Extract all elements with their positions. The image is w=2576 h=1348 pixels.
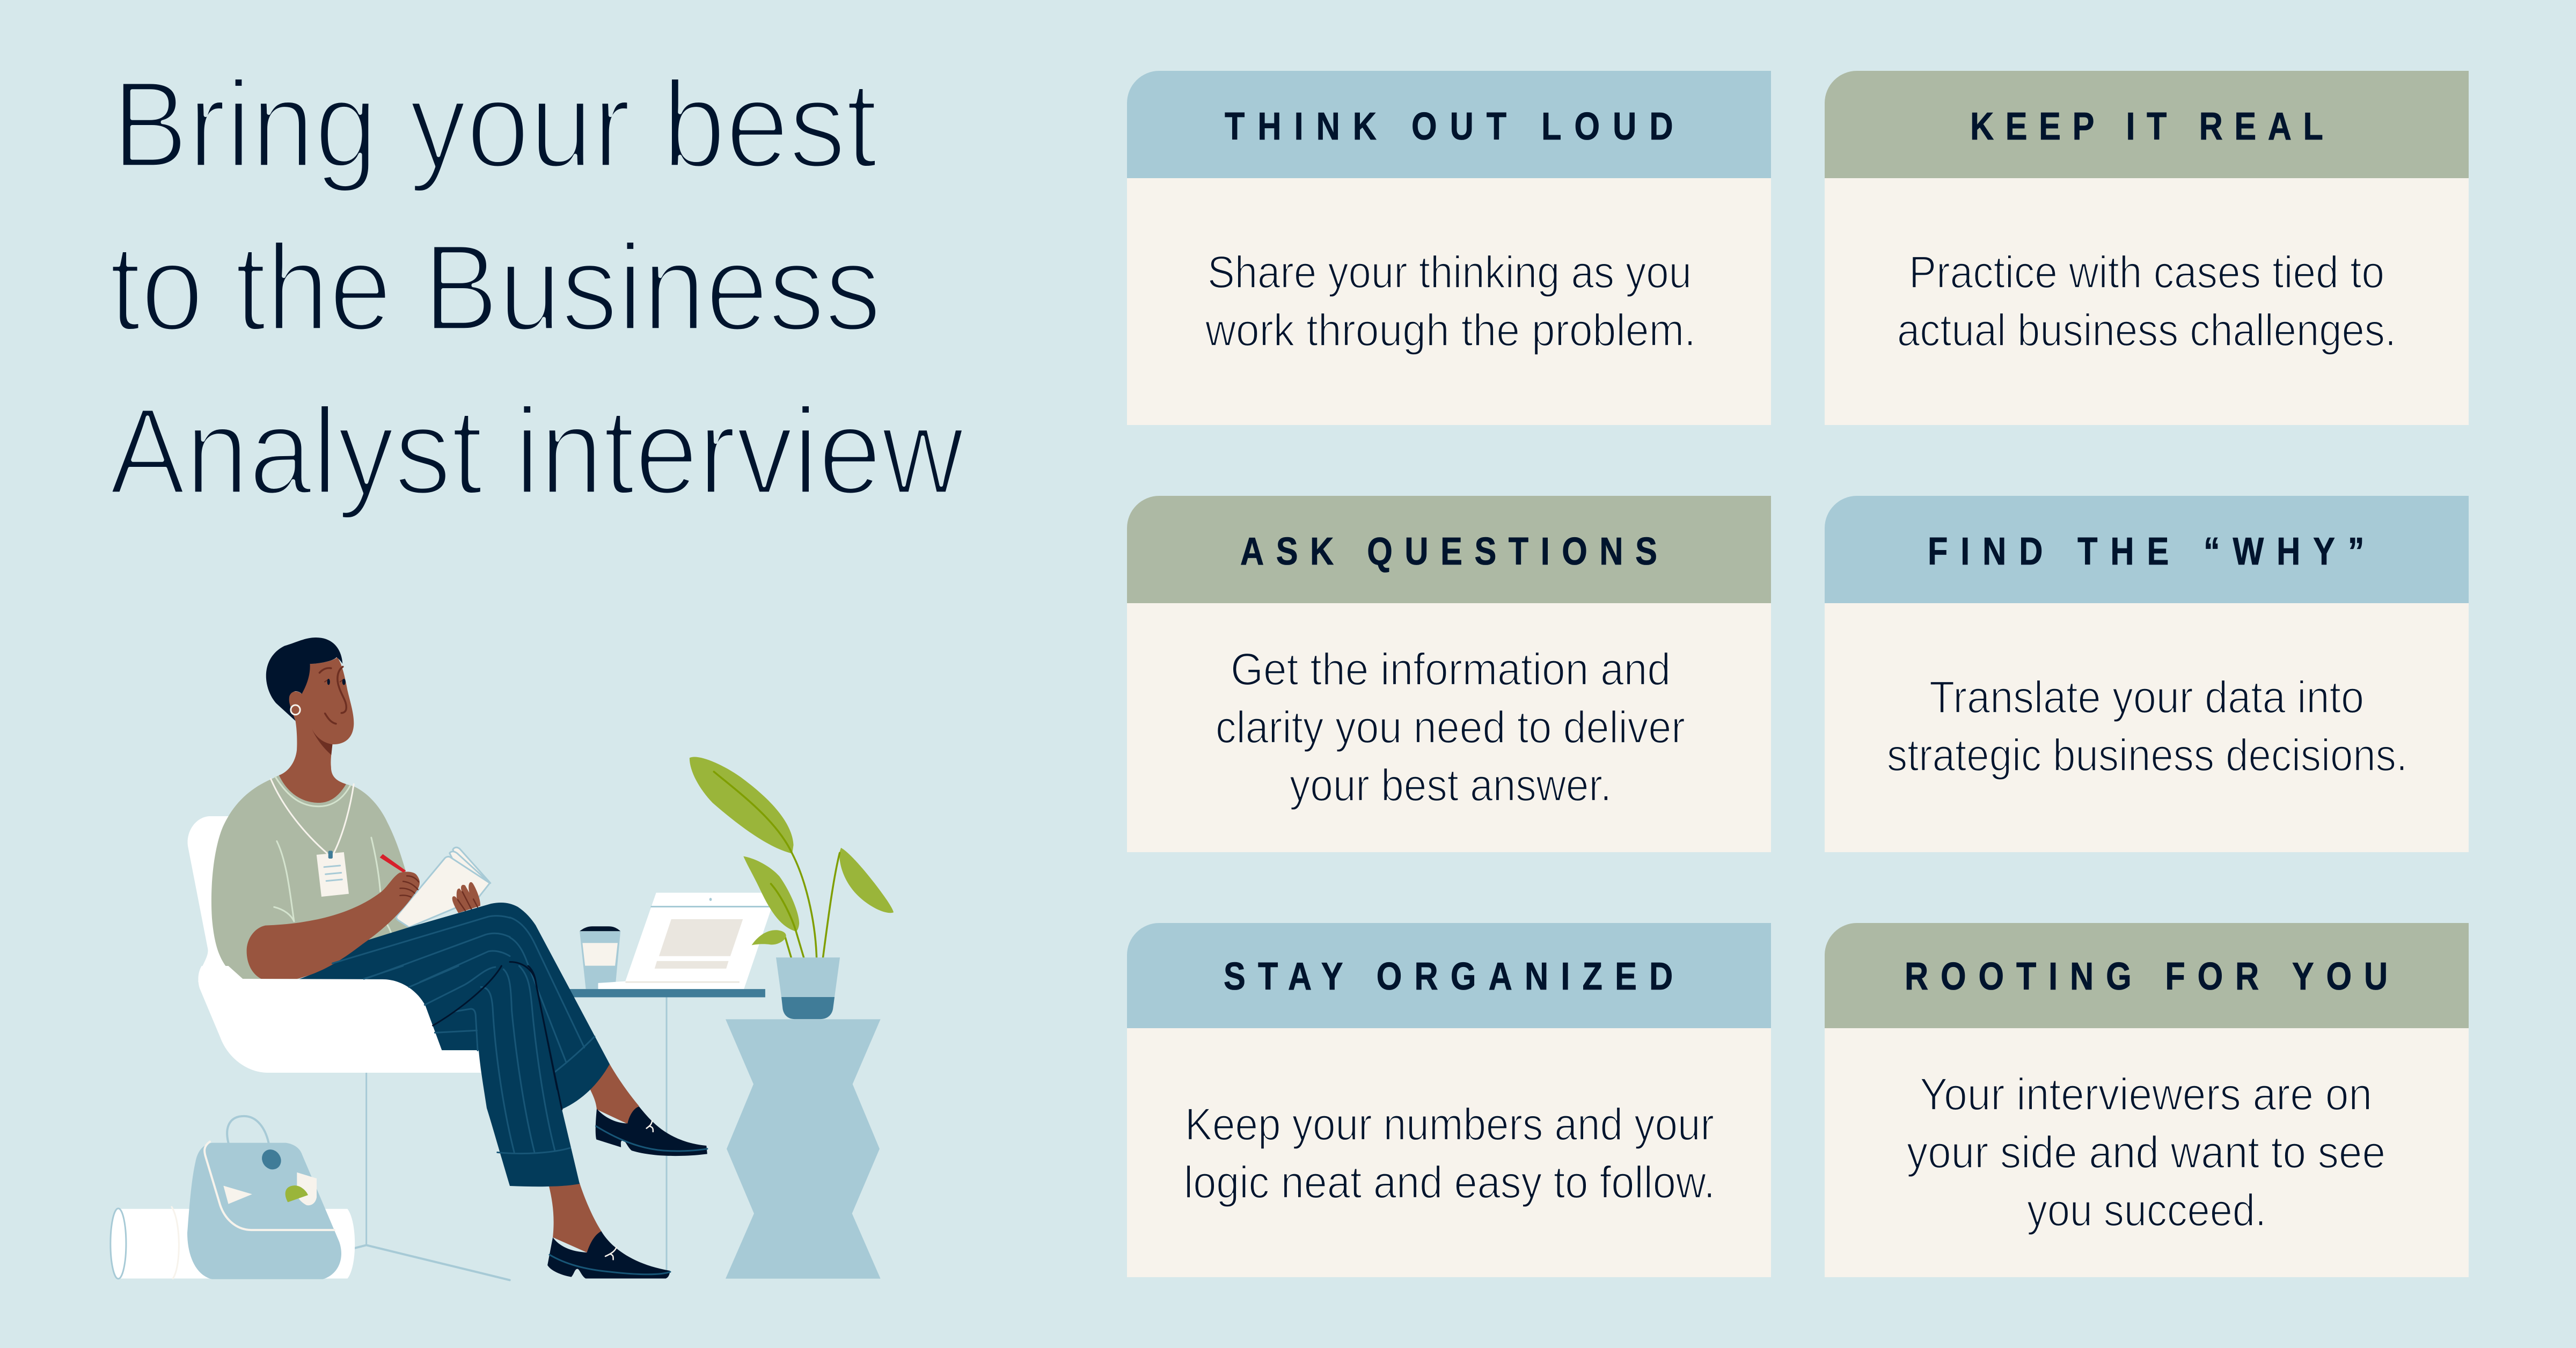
heading: ASK QUESTIONS bbox=[1240, 530, 1657, 573]
panel: stay organized bbox=[1127, 923, 1771, 1277]
earring bbox=[291, 705, 300, 715]
legs skin bbox=[548, 1064, 639, 1252]
forearm bbox=[247, 872, 420, 979]
header band bbox=[1127, 923, 1771, 1028]
body text bbox=[1216, 644, 1685, 810]
body background bbox=[1825, 178, 2469, 425]
title: Analyst interview bbox=[109, 382, 964, 520]
shirt lines bbox=[274, 777, 391, 933]
rolled mat bbox=[111, 1207, 355, 1279]
header band bbox=[1825, 496, 2469, 603]
chair seat bbox=[198, 966, 481, 1073]
header band bbox=[1127, 496, 1771, 603]
body text: actual business challenges. bbox=[1897, 305, 2396, 355]
backpack bbox=[187, 1116, 341, 1279]
header band bbox=[1825, 923, 2469, 1028]
body text bbox=[1205, 247, 1696, 355]
body text: you succeed. bbox=[2027, 1185, 2266, 1235]
chair legs bbox=[352, 1073, 510, 1280]
illustration: person at desk bbox=[111, 638, 894, 1280]
pen bbox=[380, 854, 406, 873]
person upper body bbox=[211, 638, 491, 980]
ear bbox=[289, 691, 302, 714]
hand on notebook bbox=[452, 882, 480, 913]
badge bbox=[317, 851, 349, 897]
face details bbox=[319, 666, 346, 724]
pedestal side table bbox=[726, 1019, 881, 1279]
body background bbox=[1825, 1028, 2469, 1277]
body text: logic neat and easy to follow. bbox=[1184, 1157, 1715, 1207]
hair bbox=[266, 638, 342, 721]
body text bbox=[1897, 247, 2396, 355]
shirt bbox=[211, 775, 420, 980]
left shoe bbox=[547, 1231, 670, 1279]
body text: Practice with cases tied to bbox=[1909, 247, 2384, 297]
right shoe bbox=[596, 1107, 707, 1156]
body text bbox=[1907, 1069, 2385, 1235]
panel: think out loud bbox=[1127, 71, 1771, 425]
table leg bbox=[665, 997, 668, 1270]
panel: ask questions bbox=[1127, 496, 1771, 852]
body background bbox=[1127, 1028, 1771, 1277]
laptop bbox=[598, 893, 772, 989]
body text: your best answer. bbox=[1290, 760, 1612, 810]
trouser stripes: knee bbox=[510, 918, 595, 1089]
head and neck bbox=[279, 657, 354, 803]
table top bbox=[568, 989, 765, 997]
body background bbox=[1127, 603, 1771, 852]
chair back bbox=[188, 816, 245, 982]
body text bbox=[1887, 672, 2407, 780]
heading: ROOTING FOR YOU bbox=[1905, 955, 2388, 998]
body text: Your interviewers are on bbox=[1920, 1069, 2372, 1119]
lanyard bbox=[271, 779, 354, 853]
body text: Get the information and bbox=[1231, 644, 1671, 694]
title bbox=[109, 55, 964, 520]
body text: clarity you need to deliver bbox=[1216, 702, 1685, 752]
potted plant bbox=[690, 757, 894, 1019]
heading: FIND THE “WHY” bbox=[1928, 530, 2364, 573]
title: to the Business bbox=[109, 218, 881, 356]
notebook bbox=[397, 847, 491, 927]
trouser stripes: thigh bbox=[332, 916, 510, 982]
trousers bbox=[297, 903, 610, 1186]
panel: rooting for you bbox=[1825, 923, 2469, 1277]
body text: Translate your data into bbox=[1929, 672, 2364, 722]
heading: STAY ORGANIZED bbox=[1224, 955, 1673, 998]
header band bbox=[1825, 71, 2469, 178]
trouser stripes: lower leg bbox=[364, 966, 570, 1154]
body text: work through the problem. bbox=[1205, 305, 1696, 355]
panel: find the why bbox=[1825, 496, 2469, 852]
body text bbox=[1184, 1099, 1715, 1207]
body text: Keep your numbers and your bbox=[1185, 1099, 1714, 1149]
body background bbox=[1127, 178, 1771, 425]
heading: KEEP IT REAL bbox=[1970, 105, 2323, 148]
heading: THINK OUT LOUD bbox=[1225, 105, 1673, 148]
body background bbox=[1825, 603, 2469, 852]
panel: keep it real bbox=[1825, 71, 2469, 425]
coffee cup bbox=[580, 926, 620, 989]
header band bbox=[1127, 71, 1771, 178]
body text: strategic business decisions. bbox=[1887, 730, 2407, 780]
jaw shadow bbox=[312, 729, 332, 755]
body text: your side and want to see bbox=[1907, 1127, 2385, 1177]
body text: Share your thinking as you bbox=[1208, 247, 1692, 297]
title: Bring your best bbox=[112, 55, 877, 193]
